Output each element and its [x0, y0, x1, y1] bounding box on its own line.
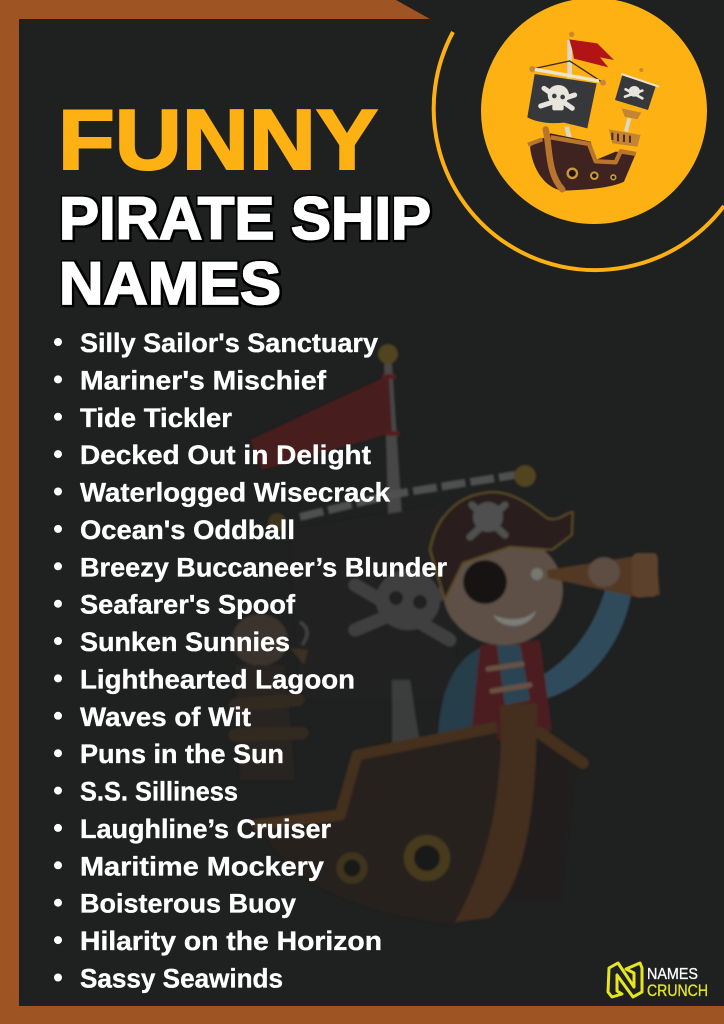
list item 16: Boisterous Buoy	[80, 889, 296, 919]
list item 2: Mariner's Mischief	[80, 365, 326, 395]
yellow circle	[481, 0, 707, 224]
portholes	[568, 169, 616, 180]
list item 7: Breezy Buccaneer’s Blunder	[80, 552, 447, 582]
logo wordmark bottom: CRUNCH	[647, 982, 708, 1000]
list item 8: Seafarer's Spoof	[80, 590, 295, 620]
faded boy head	[430, 492, 573, 645]
list of ship names	[54, 328, 447, 994]
list item 9: Sunken Sunnies	[80, 627, 290, 657]
heading: FUNNY: FUNNY	[58, 93, 378, 188]
faded pirate boy on ship background art	[232, 344, 660, 925]
list item 11: Waves of Wit	[80, 702, 251, 732]
list item 6: Ocean's Oddball	[80, 515, 295, 545]
hull rail and stem	[528, 129, 636, 189]
list item 1: Silly Sailor's Sanctuary	[80, 328, 378, 358]
icon: pirate ship	[527, 32, 659, 191]
list item 3: Tide Tickler	[80, 403, 232, 433]
small sail trim	[621, 74, 659, 87]
pennant flag	[569, 39, 614, 67]
small skull	[625, 86, 642, 98]
title	[58, 93, 431, 317]
main sail	[527, 74, 597, 128]
list item 14: Laughline’s Cruiser	[80, 814, 331, 844]
heading: NAMES: NAMES	[59, 250, 281, 317]
list item 5: Waterlogged Wisecrack	[80, 478, 390, 508]
list item 15: Maritime Mockery	[80, 851, 324, 881]
icon: N logo mark	[608, 963, 642, 997]
list item 12: Puns in the Sun	[80, 739, 284, 769]
faded boy arms and vest	[438, 590, 632, 745]
sail trim	[535, 69, 599, 81]
list item 10: Lighthearted Lagoon	[80, 664, 355, 694]
mast	[567, 40, 570, 137]
logo: Names Crunch	[608, 963, 708, 1000]
skull and crossbones	[541, 85, 575, 110]
faded ship hull	[253, 703, 583, 925]
faded spyglass and hand	[547, 553, 660, 598]
rigging and finials	[529, 32, 643, 86]
list item 18: Sassy Seawinds	[80, 964, 283, 994]
list item 13: S.S. Silliness	[80, 777, 238, 807]
small sail	[615, 75, 656, 110]
faded mast and flag	[250, 344, 536, 531]
logo wordmark top: NAMES	[647, 966, 698, 983]
heading: PIRATE SHIP: PIRATE SHIP	[59, 185, 431, 252]
faded small pirate and parrot	[232, 614, 420, 780]
list item 17: Hilarity on the Horizon	[80, 926, 382, 956]
thin yellow ring	[434, 32, 724, 270]
upper mast and crow's nests	[609, 108, 641, 147]
hull	[530, 133, 636, 191]
list item 4: Decked Out in Delight	[80, 440, 371, 470]
faded black flag with big skull	[290, 505, 460, 700]
